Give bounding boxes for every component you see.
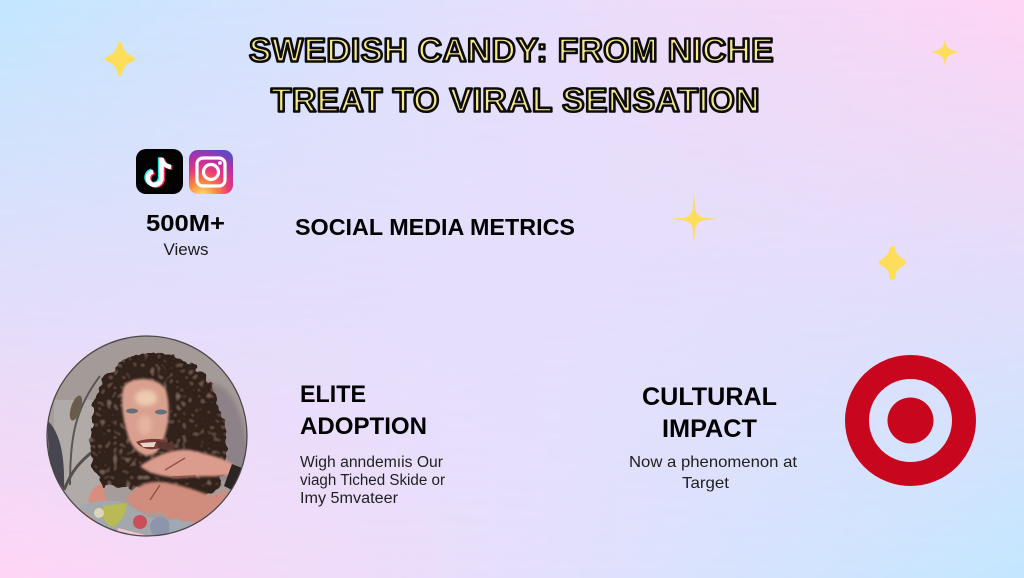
heading: cultural impact: [642, 383, 777, 443]
icon: sparkle top left: [107, 44, 133, 74]
metric label: Views: Views: [163, 240, 209, 259]
icon: Target logo: [857, 367, 964, 474]
text block: elite adoption body: Imy 5mvateer: [300, 490, 398, 507]
icon: TikTok: [136, 149, 183, 194]
icon: Instagram: [189, 150, 233, 194]
icon: sparkle middle: [671, 195, 716, 241]
heading: elite adoption: [300, 381, 427, 440]
title: [249, 32, 774, 120]
title: TREAT TO VIRAL SENSATION: [271, 82, 760, 120]
metric: 500M+: 500M+: [146, 210, 225, 236]
heading: elite adoption: ADOPTION: [300, 413, 427, 440]
icon: sparkle top right: [930, 38, 960, 67]
heading: elite adoption: ELITE: [300, 381, 366, 408]
text block: elite adoption body: Wigh anndemıis Our: [300, 454, 443, 471]
icon: sparkle right: [882, 249, 903, 277]
text block: elite adoption body: viagh Tiched Skide or: [300, 472, 445, 489]
text block: cultural impact body: Now a phenomenon at: [629, 454, 798, 471]
text block: cultural impact body: [629, 454, 798, 492]
heading: cultural impact: CULTURAL: [642, 383, 777, 411]
photo: influencer portrait: [45, 336, 250, 545]
text block: elite adoption body: [300, 454, 445, 507]
title: SWEDISH CANDY: FROM NICHE: [249, 32, 774, 70]
heading: cultural impact: IMPACT: [662, 415, 757, 443]
text block: cultural impact body: Target: [682, 475, 730, 492]
heading: social media metrics: SOCIAL MEDIA METRICS: [295, 214, 575, 240]
